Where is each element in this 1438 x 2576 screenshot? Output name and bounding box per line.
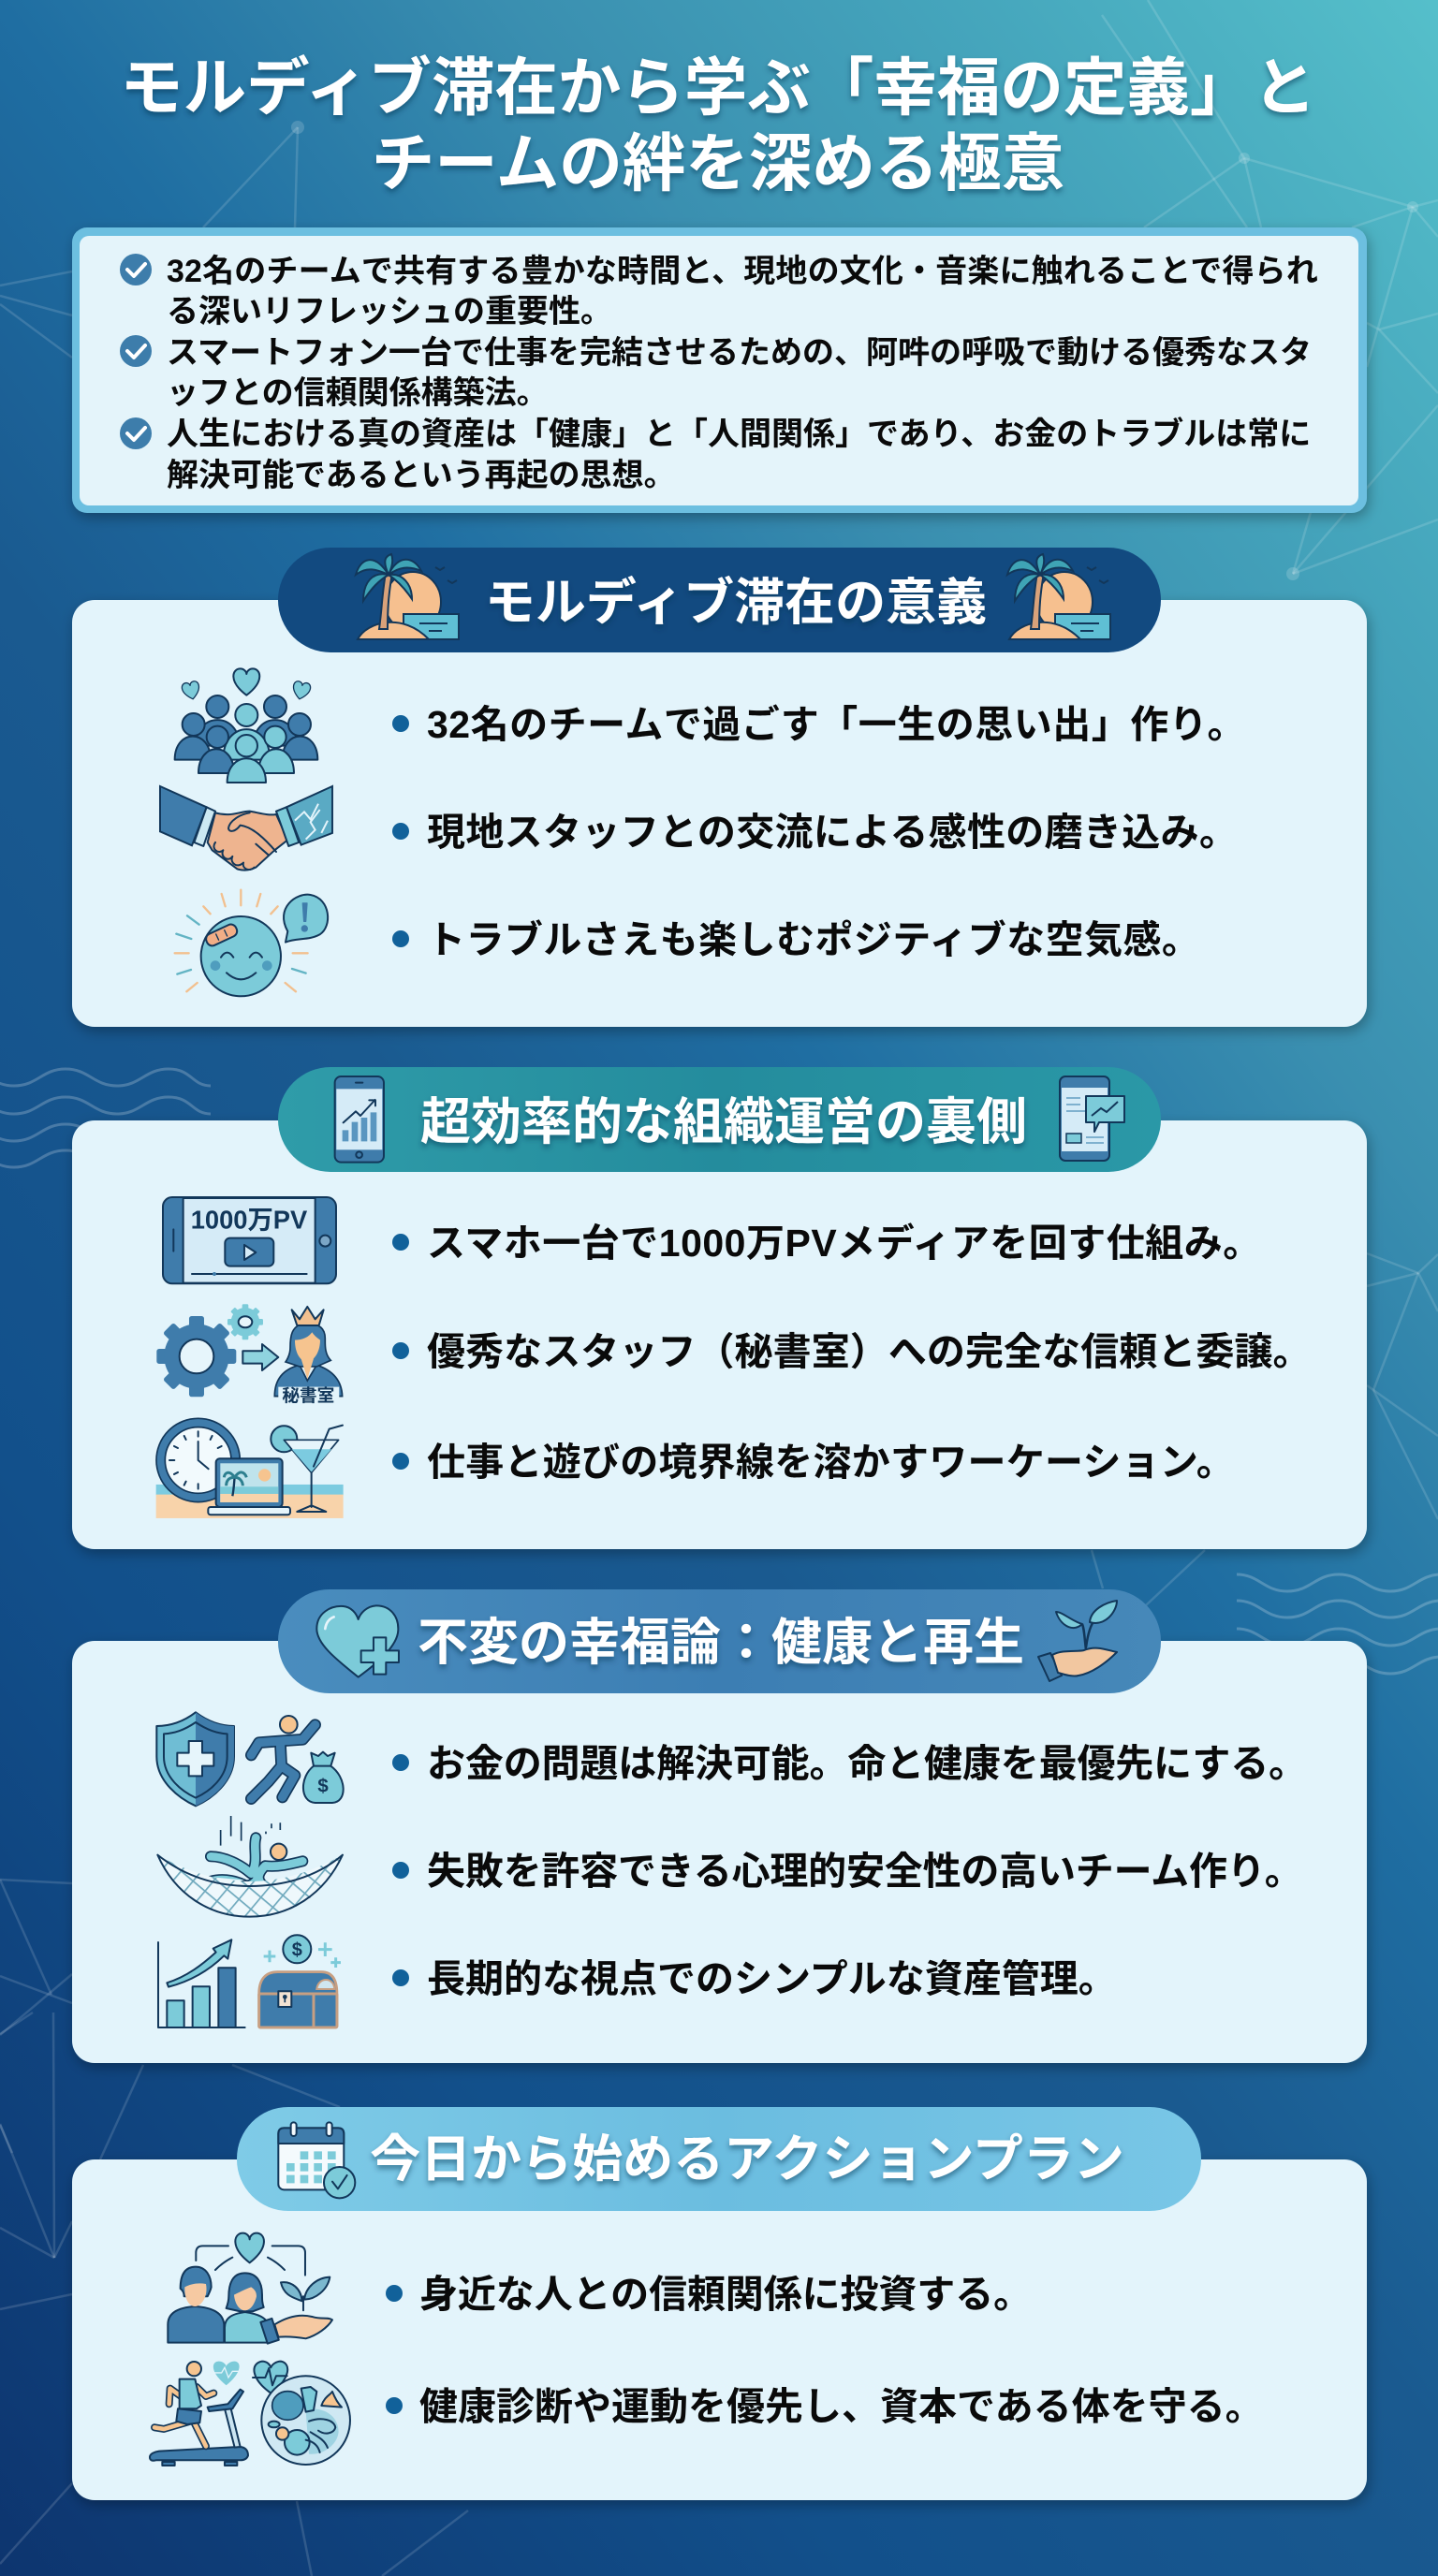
summary point 2: ッフとの信頼関係構築法。 xyxy=(167,375,549,411)
heading pill xyxy=(278,548,1161,652)
icon: growth chart and treasure chest xyxy=(158,1935,341,2027)
icon: couple nurturing a plant xyxy=(168,2233,332,2344)
title: モルディブ滞在から学ぶ「幸福の定義」と xyxy=(120,53,1316,124)
summary point 1: 32名のチームで共有する豊かな時間と、現地の文化・音楽に触れることで得られ xyxy=(167,254,1318,289)
icon: workation clock laptop cocktail xyxy=(156,1418,344,1518)
icon: palm island right xyxy=(1007,554,1110,639)
heading: 不変の幸福論：健康と再生 xyxy=(418,1615,1024,1671)
panel: 超効率的な組織運営の裏側 xyxy=(72,1067,1367,1549)
icon: phone with growth chart xyxy=(335,1076,384,1163)
list: 3 items: 優秀なスタッフ（秘書室）への完全な信頼と委譲。 xyxy=(427,1330,1312,1373)
list: 2 items: 身近な人との信頼関係に投資する。 xyxy=(419,2273,1032,2316)
list: 3 items: 現地スタッフとの交流による感性の磨き込み。 xyxy=(427,811,1238,854)
heading pill xyxy=(278,1589,1161,1693)
summary point 1 xyxy=(120,254,1318,329)
icon: growth chart and treasure chest: $ xyxy=(292,1939,302,1960)
list: 3 items xyxy=(392,703,1246,961)
icon: smiling face with bandage xyxy=(175,890,328,996)
icon: delegation to secretary: 秘書室 xyxy=(282,1386,334,1406)
list: 3 items xyxy=(392,1222,1312,1484)
heading: モルディブ滞在の意義 xyxy=(485,575,987,631)
list: 3 items: 32名のチームで過ごす「一生の思い出」作り。 xyxy=(427,703,1246,746)
summary point 2: スマートフォン一台で仕事を完結させるための、阿吽の呼吸で動ける優秀なスタ xyxy=(167,335,1312,371)
list: 3 items: スマホ一台で1000万PVメディアを回す仕組み。 xyxy=(427,1222,1262,1265)
panel: モルディブ滞在の意義 xyxy=(72,548,1367,1027)
heading pill xyxy=(278,1067,1161,1172)
icon: palm island left xyxy=(356,554,459,639)
summary point 2 xyxy=(120,335,1312,411)
heading: 超効率的な組織運営の裏側 xyxy=(420,1094,1027,1150)
icon: landscape phone 1000万PV: 1000万PV xyxy=(191,1206,308,1235)
icon: calendar with check xyxy=(278,2122,355,2198)
icon: delegation to secretary xyxy=(156,1304,343,1406)
title xyxy=(120,53,1316,199)
icon: shield, runner and money bag xyxy=(156,1712,344,1806)
list: 3 items xyxy=(392,1742,1307,2000)
list: 2 items xyxy=(386,2273,1264,2428)
icon: phone with message xyxy=(1060,1076,1124,1161)
summary point 1: る深いリフレッシュの重要性。 xyxy=(167,294,612,329)
panel: summary xyxy=(72,227,1367,513)
icon: landscape phone 1000万PV xyxy=(163,1197,336,1283)
icon: shield, runner and money bag: $ xyxy=(317,1776,329,1797)
icon: heart with plus xyxy=(316,1605,399,1677)
list: 3 items: 失敗を許容できる心理的安全性の高いチーム作り。 xyxy=(427,1850,1303,1893)
summary point 3: 人生における真の資産は「健康」と「人間関係」であり、お金のトラブルは常に xyxy=(167,416,1311,452)
summary point 3 xyxy=(120,416,1311,493)
summary point 3: 解決可能であるという再起の思想。 xyxy=(167,458,676,493)
heading pill xyxy=(237,2107,1201,2211)
icon: plant on hand xyxy=(1038,1601,1117,1681)
heading: 今日から始めるアクションプラン xyxy=(370,2131,1124,2188)
title: チームの絆を深める極意 xyxy=(372,129,1064,199)
list: 2 items: 健康診断や運動を優先し、資本である体を守る。 xyxy=(419,2385,1264,2428)
list: 3 items: 長期的な視点でのシンプルな資産管理。 xyxy=(427,1957,1117,2000)
panel: 今日から始めるアクションプラン xyxy=(72,2107,1367,2500)
icon: handshake xyxy=(160,786,332,871)
icon: safety net catching a person xyxy=(157,1816,343,1917)
list: 3 items: お金の問題は解決可能。命と健康を最優先にする。 xyxy=(427,1742,1307,1785)
list: 3 items: 仕事と遊びの境界線を溶かすワーケーション。 xyxy=(427,1441,1235,1484)
list: 3 items: トラブルさえも楽しむポジティブな空気感。 xyxy=(427,918,1200,961)
icon: team with hearts xyxy=(175,668,317,783)
panel: 不変の幸福論 xyxy=(72,1589,1367,2063)
icon: runner on treadmill with heart xyxy=(150,2362,350,2466)
